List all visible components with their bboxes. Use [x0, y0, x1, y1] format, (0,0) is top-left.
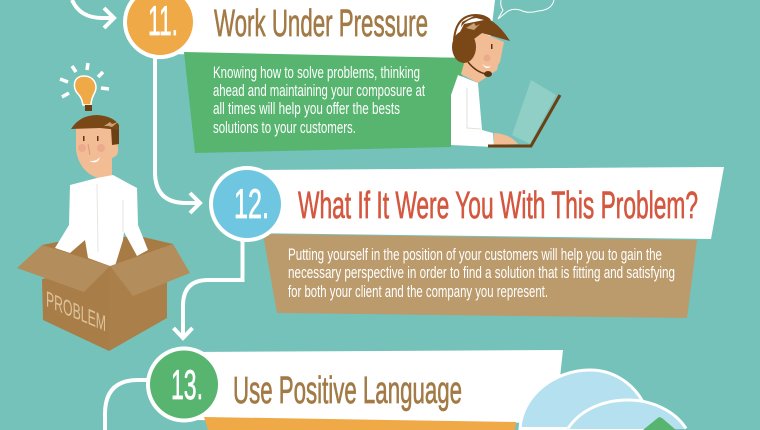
text panel 11	[184, 52, 465, 153]
text panel 13	[204, 417, 516, 430]
text panel 12	[263, 234, 697, 318]
box interior	[42, 237, 173, 280]
arrow: step 11 to step 12	[155, 55, 200, 213]
heading 11: Work Under Pressure	[214, 3, 428, 45]
badge 11	[123, 0, 197, 59]
hair and headset	[458, 15, 510, 45]
badge 12	[209, 166, 285, 242]
box label: PROBLEM	[46, 286, 106, 336]
hand	[494, 133, 518, 145]
badge 13	[146, 346, 222, 422]
arrow: step 12 to step 13	[174, 240, 242, 338]
panel: step 13	[146, 346, 563, 430]
body text 11: all times will help you offer the bests	[213, 99, 400, 118]
body text 12	[288, 245, 675, 301]
man in box figure	[17, 115, 190, 351]
box front	[42, 266, 109, 351]
arrow: step 13 outgoing	[105, 380, 148, 430]
heading banner 13	[190, 350, 563, 423]
head	[71, 115, 119, 180]
shirt	[451, 75, 494, 147]
body text 12: for both your client and the company you represent.	[288, 282, 548, 301]
arrow: incoming to step 11	[72, 0, 114, 28]
badge 12: 12.	[234, 180, 269, 227]
heading banner 11	[160, 0, 495, 58]
body text 11: Knowing how to solve problems, thinking	[213, 63, 420, 82]
body text 11	[213, 63, 425, 137]
headset agent figure	[451, 15, 560, 147]
face	[461, 30, 504, 83]
heading 13: Use Positive Language	[233, 370, 462, 412]
badge 13: 13.	[171, 361, 203, 408]
panel: step 11	[123, 0, 495, 153]
microphone	[468, 62, 492, 77]
laptop screen	[512, 80, 556, 144]
shirt	[55, 175, 148, 266]
icon: thought bubble	[498, 0, 554, 19]
box flaps	[17, 245, 110, 292]
body text 11: solutions to your customers.	[213, 118, 356, 137]
icon: speech bubbles with thumb	[520, 370, 686, 430]
icon: light bulb	[60, 63, 109, 111]
panel: step 12	[209, 166, 724, 318]
laptop	[488, 95, 560, 146]
heading banner 12	[247, 167, 724, 239]
body text 11: ahead and maintaining your composure at	[213, 81, 425, 100]
